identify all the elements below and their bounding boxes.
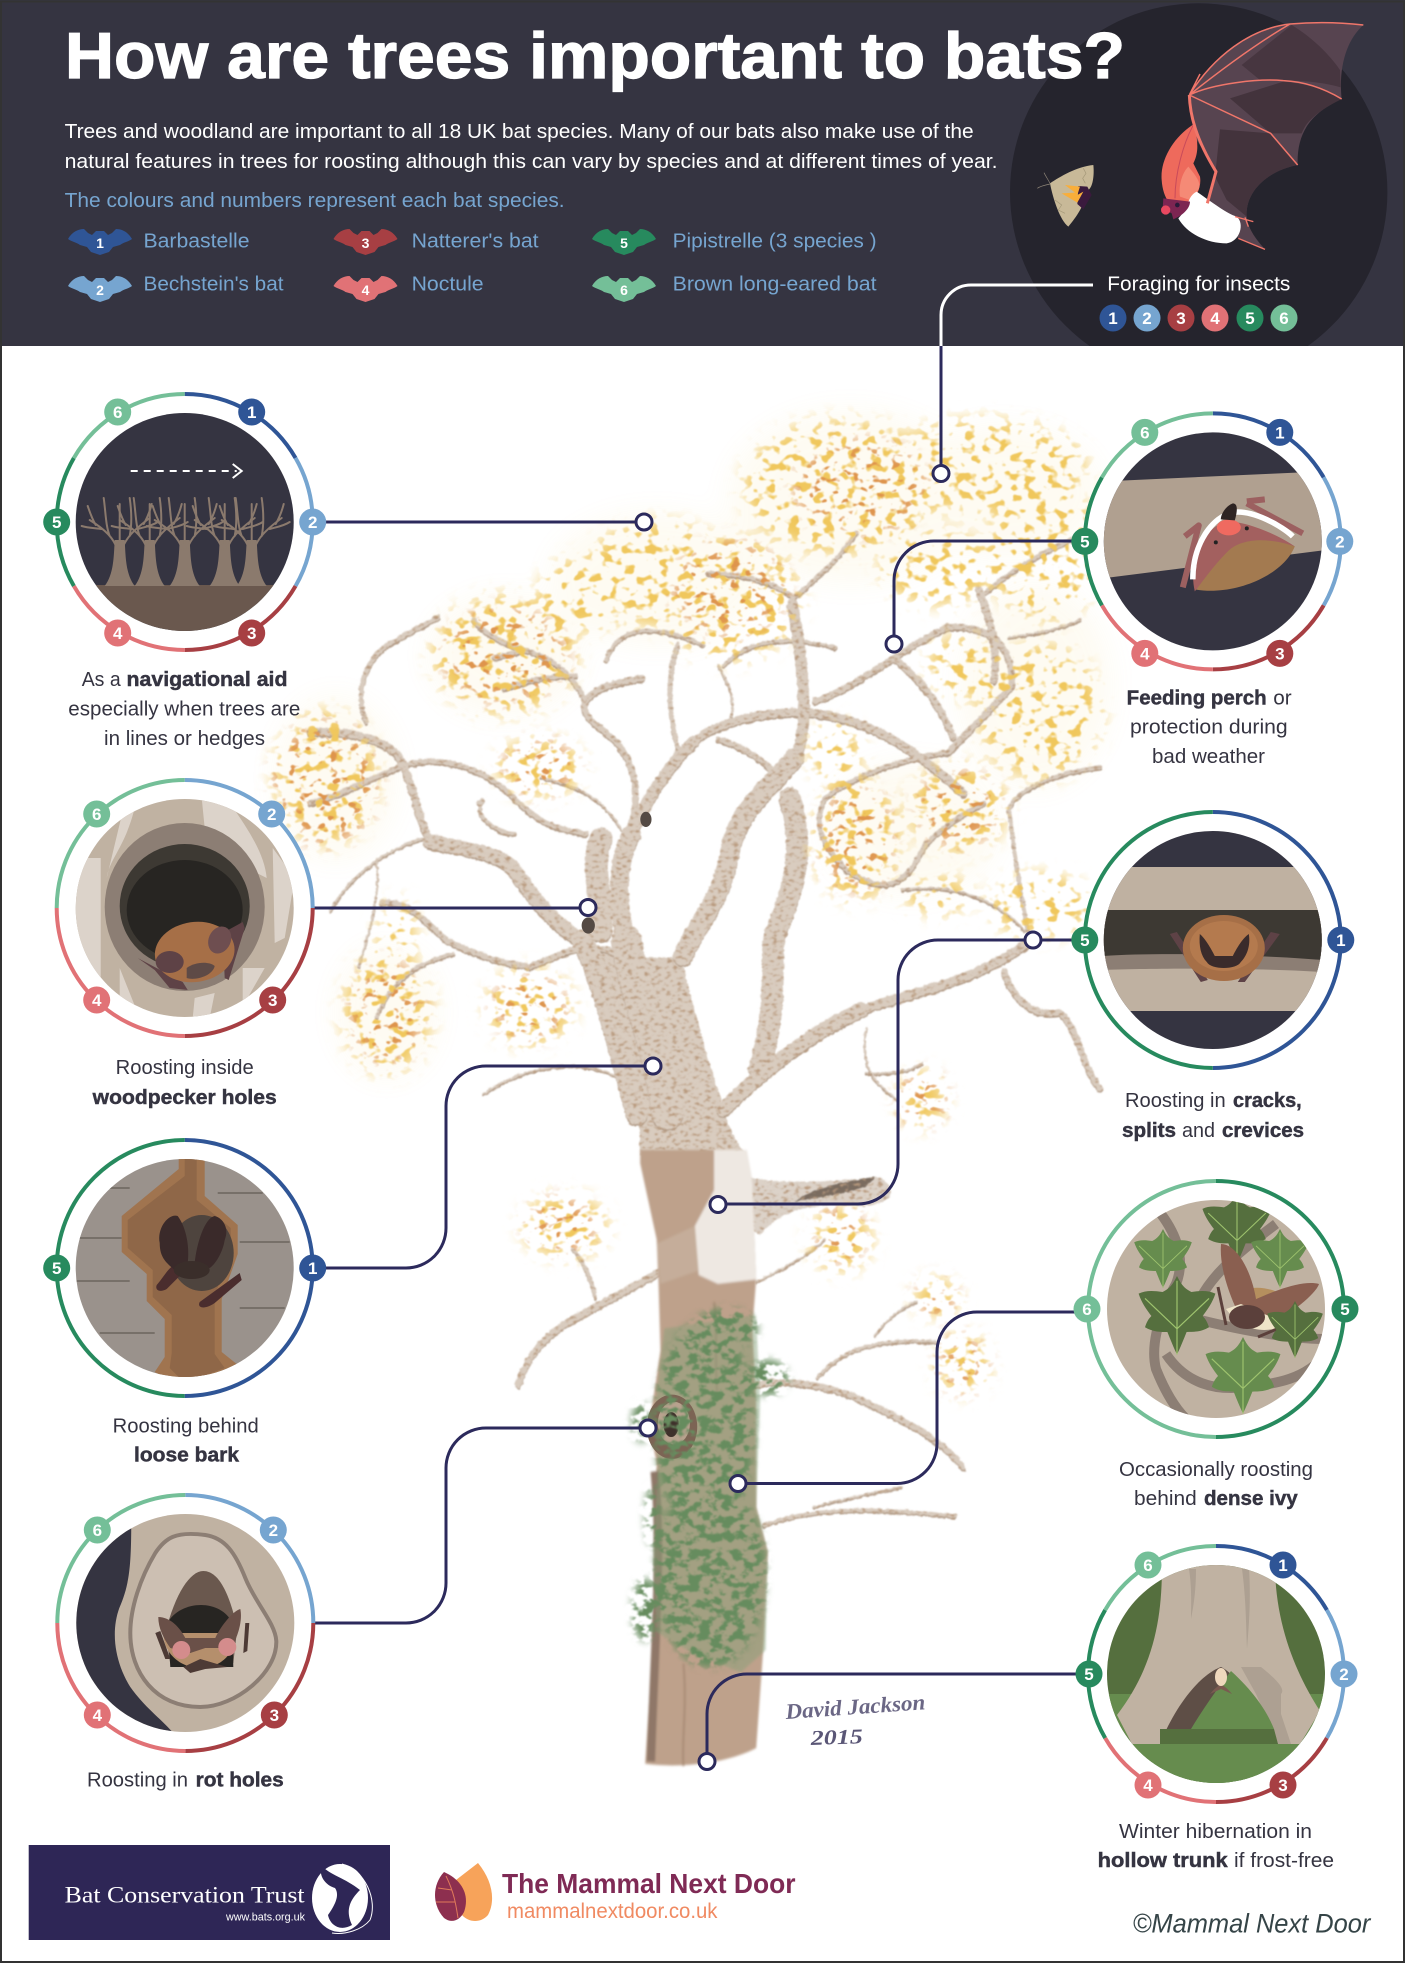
caption: navigational aid: especially when trees are — [68, 699, 300, 721]
illustration: tree line — [75, 412, 295, 635]
species ring — [1085, 413, 1341, 669]
legend: brown long-eared bat: 6 — [620, 282, 628, 298]
logo: Bat Conservation Trust: Bat Conservation Trust — [65, 1883, 305, 1908]
panel: loose bark: 5 — [52, 1259, 61, 1278]
legend: pipistrelle: 5 — [620, 235, 628, 251]
dark circle — [1010, 3, 1387, 381]
legend: brown long-eared bat: Brown long-eared bat — [673, 274, 877, 296]
panel: woodpecker holes: 6 — [92, 805, 101, 824]
caption: dense ivy — [1119, 1459, 1313, 1510]
panel: feeding perch: 3 — [1275, 644, 1285, 663]
connector: hollow trunk — [699, 1674, 1089, 1770]
legend: natterer's bat: 3 — [362, 235, 370, 251]
panel: hollow trunk: 4 — [1143, 1776, 1153, 1795]
panel: woodpecker holes — [57, 780, 313, 1036]
trunk hole — [582, 812, 652, 934]
ivy on trunk — [632, 1308, 789, 1668]
caption: woodpecker holes: Roosting inside — [116, 1057, 254, 1079]
caption: navigational aid: in lines or hedges — [104, 728, 265, 750]
panel: feeding perch: 1 — [1275, 423, 1285, 442]
caption: loose bark: loose bark — [134, 1444, 240, 1466]
caption: rot holes: rot holes — [196, 1770, 284, 1792]
connector: foraging — [933, 285, 1093, 482]
foraging species numbers: 4 — [1210, 309, 1220, 328]
caption: dense ivy: dense ivy — [1204, 1488, 1299, 1510]
caption: navigational aid: As a — [82, 669, 122, 691]
panel: navigational aid: 4 — [113, 624, 123, 643]
panel: cracks and crevices: 5 — [1080, 931, 1090, 950]
foraging species numbers: 2 — [1142, 309, 1152, 328]
caption: cracks and crevices: Roosting in — [1125, 1090, 1226, 1112]
panel: dense ivy — [1074, 1181, 1358, 1437]
artist signature: 2015 — [809, 1724, 863, 1750]
caption: cracks and crevices — [1122, 1090, 1304, 1142]
panel: woodpecker holes: 2 — [267, 805, 276, 824]
caption: navigational aid: navigational aid — [126, 669, 288, 691]
legend: barbastelle: 1 — [96, 235, 104, 251]
panel: feeding perch: 5 — [1080, 532, 1090, 551]
panel: woodpecker holes: 4 — [92, 991, 102, 1010]
header panel — [0, 0, 1405, 381]
panel: cracks and crevices — [1071, 812, 1354, 1068]
species ring — [57, 394, 313, 650]
panel: navigational aid — [43, 394, 326, 650]
legend heading: The colours and numbers represent each bat species. — [65, 190, 565, 212]
panel: loose bark — [43, 1140, 326, 1396]
foraging species numbers: 1 — [1108, 309, 1118, 328]
artist signature: David Jackson — [784, 1689, 926, 1724]
foraging species numbers: 5 — [1245, 309, 1255, 328]
connector: rot holes — [313, 1420, 656, 1623]
caption: feeding perch: Feeding perch — [1127, 687, 1267, 709]
panel: rot holes: 6 — [93, 1521, 102, 1540]
panel: navigational aid: 1 — [247, 403, 256, 422]
panel: dense ivy: 6 — [1082, 1300, 1092, 1319]
pale foliage wash — [274, 410, 1111, 1079]
legend: bechstein's bat: Bechstein's bat — [144, 274, 284, 296]
caption: rot holes: Roosting in — [87, 1770, 188, 1792]
caption: rot holes — [87, 1770, 284, 1792]
species ring — [57, 1140, 313, 1396]
species ring — [1088, 1546, 1344, 1802]
connector: loose bark — [313, 1058, 661, 1268]
intro text — [65, 121, 998, 173]
lower trunk — [640, 1150, 768, 1766]
panel: hollow trunk — [1076, 1546, 1358, 1802]
caption: feeding perch — [1127, 687, 1292, 768]
copyright: ©Mammal Next Door — [1133, 1909, 1371, 1939]
caption: feeding perch: or — [1273, 687, 1292, 709]
intro text: natural features in trees for roosting although this can vary by species and at different times of year. — [65, 151, 998, 173]
knot — [647, 1395, 697, 1459]
logo: Bat Conservation Trust: www.bats.org.uk — [225, 1912, 305, 1924]
legend: natterer's bat: Natterer's bat — [412, 231, 539, 253]
panel: rot holes: 4 — [93, 1706, 103, 1725]
logo: The Mammal Next Door: The Mammal Next Door — [502, 1868, 796, 1899]
caption: woodpecker holes — [92, 1057, 277, 1109]
panel: rot holes — [57, 1495, 313, 1751]
panel: loose bark: 1 — [308, 1259, 317, 1278]
species ring — [57, 780, 313, 1036]
legend: brown long-eared bat — [592, 274, 877, 302]
panel: navigational aid: 6 — [113, 403, 122, 422]
upper trunk — [583, 948, 746, 1155]
illustration: feeding bat — [1103, 431, 1323, 651]
species ring — [1085, 812, 1341, 1068]
logo: The Mammal Next Door: mammalnextdoor.co.uk — [507, 1900, 718, 1923]
panel: rot holes: 2 — [269, 1521, 278, 1540]
ivy wash — [653, 1315, 768, 1672]
connector: feeding perch — [886, 541, 1085, 652]
panel: hollow trunk: 2 — [1339, 1665, 1349, 1684]
caption: hollow trunk: Winter hibernation in — [1119, 1821, 1312, 1843]
illustration: loose bark — [75, 1158, 295, 1388]
panel: navigational aid: 3 — [247, 624, 256, 643]
caption: feeding perch: bad weather — [1152, 746, 1265, 768]
caption: cracks and crevices: crevices — [1222, 1120, 1304, 1142]
caption: hollow trunk: if frost-free — [1234, 1850, 1334, 1872]
legend: barbastelle — [68, 229, 250, 255]
intro text: Trees and woodland are important to all 18 UK bat species. Many of our bats also make use of the — [65, 121, 974, 143]
title: How are trees important to bats? — [65, 19, 1125, 92]
panel: navigational aid: 5 — [52, 513, 61, 532]
dark limb — [745, 1177, 891, 1235]
caption: dense ivy: Occasionally roosting — [1119, 1459, 1313, 1481]
legend: pipistrelle — [592, 229, 877, 255]
illustration: ivy — [1106, 1193, 1326, 1419]
panel: feeding perch — [1071, 413, 1353, 669]
connector: navigational aid — [313, 514, 652, 530]
panel: feeding perch: 4 — [1140, 644, 1150, 663]
caption: loose bark — [113, 1416, 259, 1466]
panel: hollow trunk: 6 — [1143, 1556, 1153, 1575]
panel: woodpecker holes: 3 — [268, 991, 277, 1010]
panel: dense ivy: 5 — [1340, 1300, 1350, 1319]
legend: barbastelle: Barbastelle — [144, 231, 250, 253]
illustration: crack — [1103, 830, 1323, 1050]
illustration: hollow trunk — [1106, 1564, 1326, 1784]
legend: noctule: 4 — [362, 282, 370, 298]
caption: woodpecker holes: woodpecker holes — [92, 1087, 277, 1109]
legend — [68, 229, 877, 302]
caption: loose bark: Roosting behind — [113, 1416, 259, 1438]
caption: cracks and crevices: and — [1182, 1120, 1215, 1142]
foraging species numbers: 6 — [1279, 309, 1289, 328]
foraging species numbers — [1100, 304, 1298, 332]
icon: moth — [1037, 165, 1094, 227]
icon: flying bat — [1161, 23, 1363, 249]
caption: dense ivy: behind — [1134, 1488, 1197, 1510]
branches — [310, 533, 1100, 1526]
connector: woodpecker holes — [313, 900, 596, 916]
foraging species numbers: 3 — [1176, 309, 1186, 328]
legend: bechstein's bat — [68, 274, 284, 302]
legend: noctule — [334, 274, 484, 302]
legend: pipistrelle: Pipistrelle (3 species ) — [673, 231, 877, 253]
panel: hollow trunk: 5 — [1084, 1665, 1094, 1684]
logo: Bat Conservation Trust — [29, 1845, 390, 1940]
panel: hollow trunk: 3 — [1278, 1776, 1288, 1795]
caption: feeding perch: protection during — [1130, 717, 1288, 739]
panel: cracks and crevices: 1 — [1336, 931, 1346, 950]
caption: cracks and crevices: cracks, — [1233, 1090, 1302, 1112]
artist signature — [784, 1689, 926, 1750]
foliage yellow — [274, 420, 1101, 1393]
illustration: rot hole — [75, 1513, 295, 1733]
connector: cracks — [710, 932, 1084, 1212]
legend: bechstein's bat: 2 — [96, 282, 104, 298]
panel: navigational aid: 2 — [308, 513, 317, 532]
logo: The Mammal Next Door — [435, 1863, 796, 1923]
legend: noctule: Noctule — [412, 274, 484, 296]
illustration: woodpecker hole — [75, 798, 295, 1018]
caption: navigational aid — [68, 669, 300, 750]
legend: natterer's bat — [334, 229, 539, 255]
panel: feeding perch: 6 — [1140, 423, 1150, 442]
caption: cracks and crevices: splits — [1122, 1120, 1176, 1142]
connector: dense ivy — [730, 1312, 1087, 1492]
species ring — [57, 1495, 313, 1751]
tree illustration — [274, 410, 1111, 1766]
species ring — [1088, 1181, 1344, 1437]
caption: hollow trunk — [1098, 1821, 1334, 1872]
caption: hollow trunk: hollow trunk — [1098, 1850, 1229, 1872]
panel: feeding perch: 2 — [1335, 532, 1345, 551]
panel: rot holes: 3 — [270, 1706, 279, 1725]
foliage orange — [274, 441, 999, 1391]
panel: hollow trunk: 1 — [1278, 1556, 1288, 1575]
foraging label: Foraging for insects — [1107, 274, 1290, 296]
